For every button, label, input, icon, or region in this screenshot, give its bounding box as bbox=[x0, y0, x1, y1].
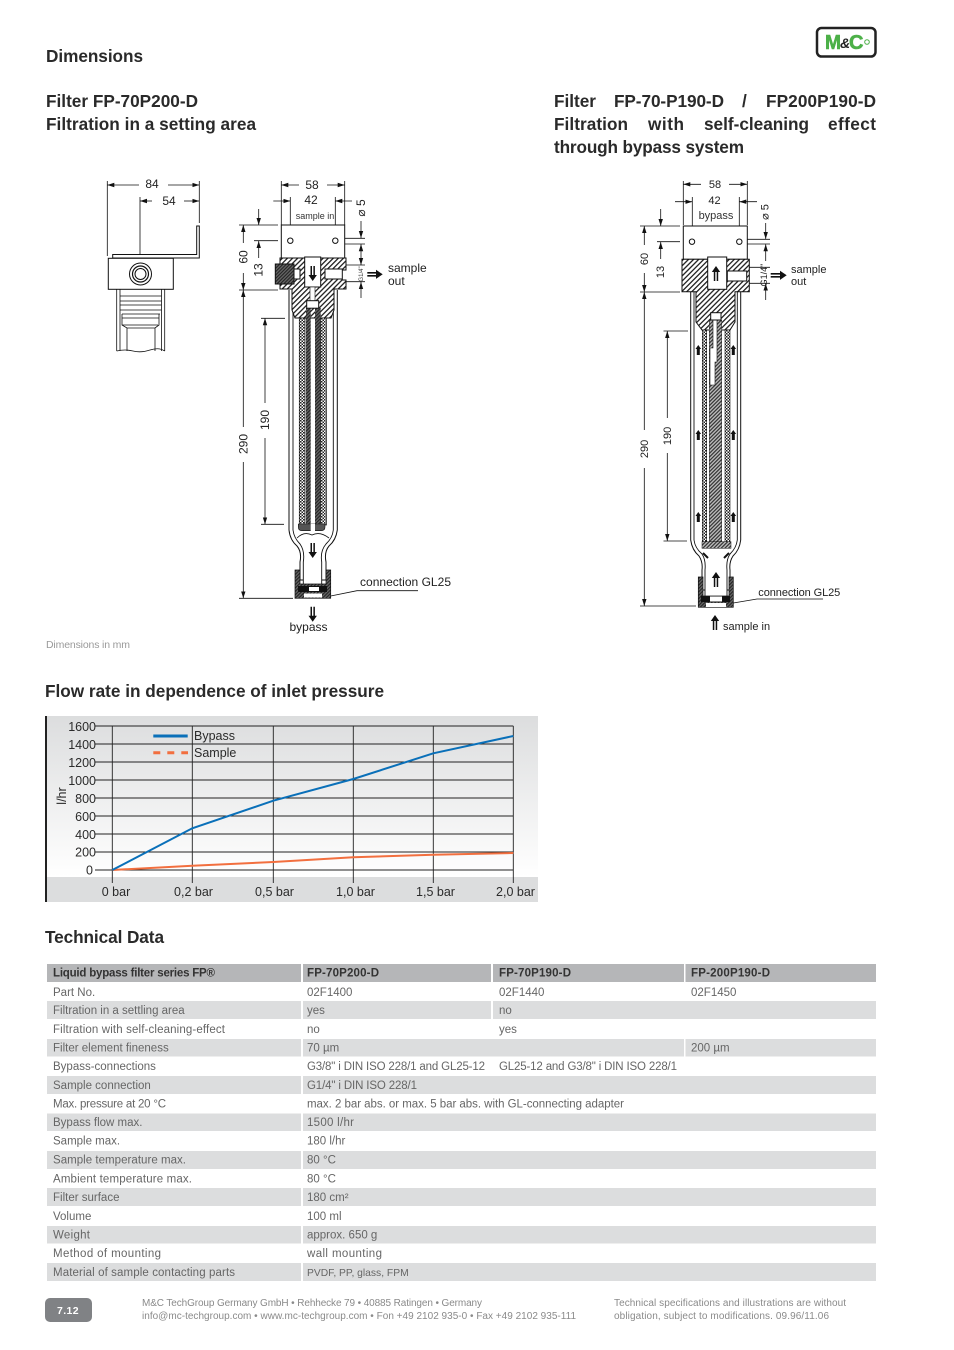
table text: G3/8" i DIN ISO 228/1 and GL25-12 bbox=[307, 1061, 485, 1073]
y axis labels: 1600 bbox=[68, 720, 96, 734]
heading: technical data: Technical Data bbox=[45, 927, 164, 947]
table text bbox=[53, 987, 736, 1279]
arrow: sample in bbox=[711, 615, 719, 630]
label: sample out: sample bbox=[388, 261, 427, 275]
table text: GL25-12 and G3/8" i DIN ISO 228/1 bbox=[499, 1061, 677, 1073]
dimension lines bbox=[640, 181, 770, 606]
y axis labels: 1200 bbox=[68, 756, 96, 770]
table text: 70 µm bbox=[307, 1042, 339, 1054]
dimension labels: 13 bbox=[655, 266, 667, 278]
table text: wall mounting bbox=[306, 1248, 382, 1260]
heading: Filter FP-70-P190-D / FP200P190-D bbox=[554, 91, 876, 157]
table text: yes bbox=[499, 1024, 517, 1036]
heading: Filter FP-70P200-D: Filtration in a setting area bbox=[46, 114, 256, 134]
dimension labels: bypass bbox=[699, 210, 734, 222]
dimension labels: 60 bbox=[639, 253, 651, 265]
page number badge bbox=[45, 1298, 92, 1322]
footer: disclaimer: obligation, subject to modifications. 09.96/11.06 bbox=[614, 1311, 829, 1322]
dimension labels: 58 bbox=[709, 179, 721, 191]
table text: 200 µm bbox=[691, 1042, 730, 1054]
arrow: sample out bbox=[771, 271, 787, 280]
note: dimensions in mm: Dimensions in mm bbox=[46, 639, 130, 651]
legend bbox=[153, 729, 236, 760]
dimension labels: 42 bbox=[304, 193, 318, 207]
y axis labels: 0 bbox=[86, 864, 93, 878]
heading: Filter FP-70-P190-D / FP200P190-D: through bypass system bbox=[554, 137, 744, 157]
table header: FP-200P190-D bbox=[691, 968, 770, 980]
logo: M&C: & bbox=[840, 35, 850, 51]
label: sample out: out bbox=[791, 276, 806, 288]
label: sample in: sample in bbox=[723, 621, 770, 633]
table text: Volume bbox=[53, 1211, 91, 1223]
table text: 80 °C bbox=[307, 1174, 336, 1186]
dimension labels: G1/4" bbox=[759, 264, 769, 286]
table text: 02F1450 bbox=[691, 987, 736, 999]
table text: Weight bbox=[53, 1230, 91, 1242]
table text: Part No. bbox=[53, 987, 95, 999]
table text: Filter surface bbox=[53, 1192, 119, 1204]
table header: FP-70P190-D bbox=[499, 968, 571, 980]
connection GL25 cap bbox=[698, 577, 733, 607]
dimension labels: sample in bbox=[296, 211, 334, 221]
table text: Sample connection bbox=[53, 1080, 151, 1092]
table text: Bypass-connections bbox=[53, 1061, 156, 1073]
heading: flow rate: Flow rate in dependence of inlet pressure bbox=[45, 681, 384, 701]
series: sample bbox=[112, 853, 513, 870]
dimension: 54: 54 bbox=[162, 194, 176, 208]
y axis labels bbox=[68, 720, 96, 878]
table text: 02F1440 bbox=[499, 987, 544, 999]
series: bypass bbox=[112, 736, 513, 870]
table text: Filtration with self-cleaning-effect bbox=[53, 1024, 226, 1036]
legend: Bypass bbox=[194, 729, 235, 743]
dimension labels: 60 bbox=[236, 250, 250, 264]
drawing: wall bracket side view bbox=[107, 177, 199, 352]
table text: Filter element fineness bbox=[53, 1042, 169, 1054]
table text: 180 cm² bbox=[307, 1192, 349, 1204]
dimension lines bbox=[239, 181, 365, 598]
chart: flow rate line chart bbox=[45, 716, 538, 902]
table text: G1/4" i DIN ISO 228/1 bbox=[307, 1080, 417, 1092]
footer: disclaimer: Technical specifications and illustrations are without bbox=[614, 1298, 846, 1309]
y axis labels: 200 bbox=[75, 846, 96, 860]
page number badge: 7.12 bbox=[57, 1305, 79, 1317]
table rows background bbox=[47, 1001, 876, 1281]
heading: Filter FP-70-P190-D / FP200P190-D: Filtration bbox=[554, 114, 628, 134]
grid bbox=[95, 726, 513, 883]
table text: Ambient temperature max. bbox=[53, 1174, 192, 1186]
table text: 80 °C bbox=[307, 1154, 336, 1166]
dimension labels: 58 bbox=[305, 178, 319, 192]
y axis labels: 600 bbox=[75, 810, 96, 824]
table text: Bypass flow max. bbox=[53, 1117, 142, 1129]
logo: M&C bbox=[817, 28, 876, 56]
x axis labels: 1,0 bar bbox=[336, 885, 375, 899]
label: connection GL25: connection GL25 bbox=[360, 575, 451, 589]
table text: Sample max. bbox=[53, 1136, 120, 1148]
label: bypass: bypass bbox=[289, 620, 328, 634]
table: technical data bbox=[47, 964, 876, 1281]
dimension labels: G3/8" bbox=[305, 244, 321, 250]
chart: flow rate line chart: l/hr bbox=[55, 787, 69, 805]
dimension labels: 42 bbox=[708, 195, 721, 207]
heading: Filter FP-70-P190-D / FP200P190-D: effect bbox=[828, 114, 876, 134]
y axis labels: 800 bbox=[75, 792, 96, 806]
dimension: 84: 84 bbox=[145, 177, 159, 191]
x axis labels: 0,2 bar bbox=[174, 885, 213, 899]
arrow: bypass bbox=[308, 607, 317, 622]
dimension labels: 290 bbox=[639, 440, 651, 458]
heading: Filter FP-70-P190-D / FP200P190-D: FP200P190-D bbox=[766, 91, 876, 111]
table text: no bbox=[307, 1024, 320, 1036]
legend: Sample bbox=[194, 746, 236, 760]
table text: Sample temperature max. bbox=[53, 1154, 186, 1166]
table header: FP-70P200-D bbox=[307, 968, 379, 980]
label: sample out: out bbox=[388, 274, 405, 288]
dimension labels: G3/8 bbox=[705, 242, 727, 253]
x axis labels: 0,5 bar bbox=[255, 885, 294, 899]
table text: approx. 650 g bbox=[307, 1230, 377, 1242]
table text: PVDF, PP, glass, FPM bbox=[307, 1268, 409, 1279]
heading: Filter FP-70-P190-D / FP200P190-D: with bbox=[647, 114, 684, 134]
table text: Material of sample contacting parts bbox=[53, 1267, 235, 1279]
dimension labels: ⌀ 5 bbox=[760, 204, 772, 220]
table text: max. 2 bar abs. or max. 5 bar abs. with GL-connecting adapter bbox=[307, 1098, 624, 1110]
dimension labels: 190 bbox=[258, 410, 272, 430]
dimension labels: 190 bbox=[662, 427, 674, 445]
logo: M&C: C bbox=[849, 32, 863, 54]
table text: 1500 l/hr bbox=[307, 1117, 354, 1129]
table text: 100 ml bbox=[307, 1211, 342, 1223]
table text: Method of mounting bbox=[53, 1248, 161, 1260]
y axis labels: 1400 bbox=[68, 738, 96, 752]
table text: no bbox=[499, 1005, 512, 1017]
heading: Filter FP-70-P190-D / FP200P190-D: / bbox=[742, 91, 747, 111]
heading: Filter FP-70-P190-D / FP200P190-D: Filter bbox=[554, 91, 596, 111]
table text: Filtration in a settling area bbox=[53, 1005, 185, 1017]
dimension labels: 290 bbox=[236, 434, 250, 454]
heading: Dimensions: Dimensions bbox=[46, 46, 143, 66]
label: connection GL25: connection GL25 bbox=[758, 587, 840, 599]
heading: Filter FP-70-P190-D / FP200P190-D: FP-70-P190-D bbox=[614, 91, 724, 111]
table text: 180 l/hr bbox=[307, 1136, 346, 1148]
x axis labels: 1,5 bar bbox=[416, 885, 455, 899]
label: sample out: sample bbox=[791, 264, 826, 276]
table text: yes bbox=[307, 1005, 325, 1017]
table text: 02F1400 bbox=[307, 987, 352, 999]
table header bbox=[47, 964, 876, 982]
arrow: sample out bbox=[367, 270, 383, 279]
logo: M&C: M bbox=[825, 32, 841, 54]
x axis labels: 0 bar bbox=[102, 885, 130, 899]
drawing: filter FP-70P190-D section bbox=[639, 179, 840, 633]
dimension labels: 13 bbox=[252, 263, 266, 277]
y axis labels: 400 bbox=[75, 828, 96, 842]
dimension labels bbox=[236, 178, 368, 454]
drawing: filter FP-70P200-D section bbox=[236, 178, 451, 634]
heading: Filter FP-70P200-D: Filter FP-70P200-D bbox=[46, 91, 198, 111]
connection GL25 cap bbox=[295, 570, 331, 598]
dimension labels: G1/4" bbox=[359, 266, 365, 282]
x axis labels: 2,0 bar bbox=[496, 885, 535, 899]
y axis labels: 1000 bbox=[68, 774, 96, 788]
footer: company address: info@mc-techgroup.com • www.mc-techgroup.com • Fon +49 2102 935-0 • Fax +49 2102 935-111 bbox=[142, 1311, 576, 1322]
table text: Max. pressure at 20 °C bbox=[53, 1098, 166, 1110]
heading: Filter FP-70-P190-D / FP200P190-D: self-cleaning bbox=[704, 114, 809, 134]
dimension labels bbox=[639, 179, 772, 458]
x axis labels bbox=[102, 885, 535, 899]
dimension labels: ⌀ 5 bbox=[354, 199, 368, 217]
table header: Liquid bypass filter series FP® bbox=[53, 968, 216, 980]
footer: company address: M&C TechGroup Germany GmbH • Rehhecke 79 • 40885 Ratingen • Germany bbox=[142, 1298, 482, 1309]
